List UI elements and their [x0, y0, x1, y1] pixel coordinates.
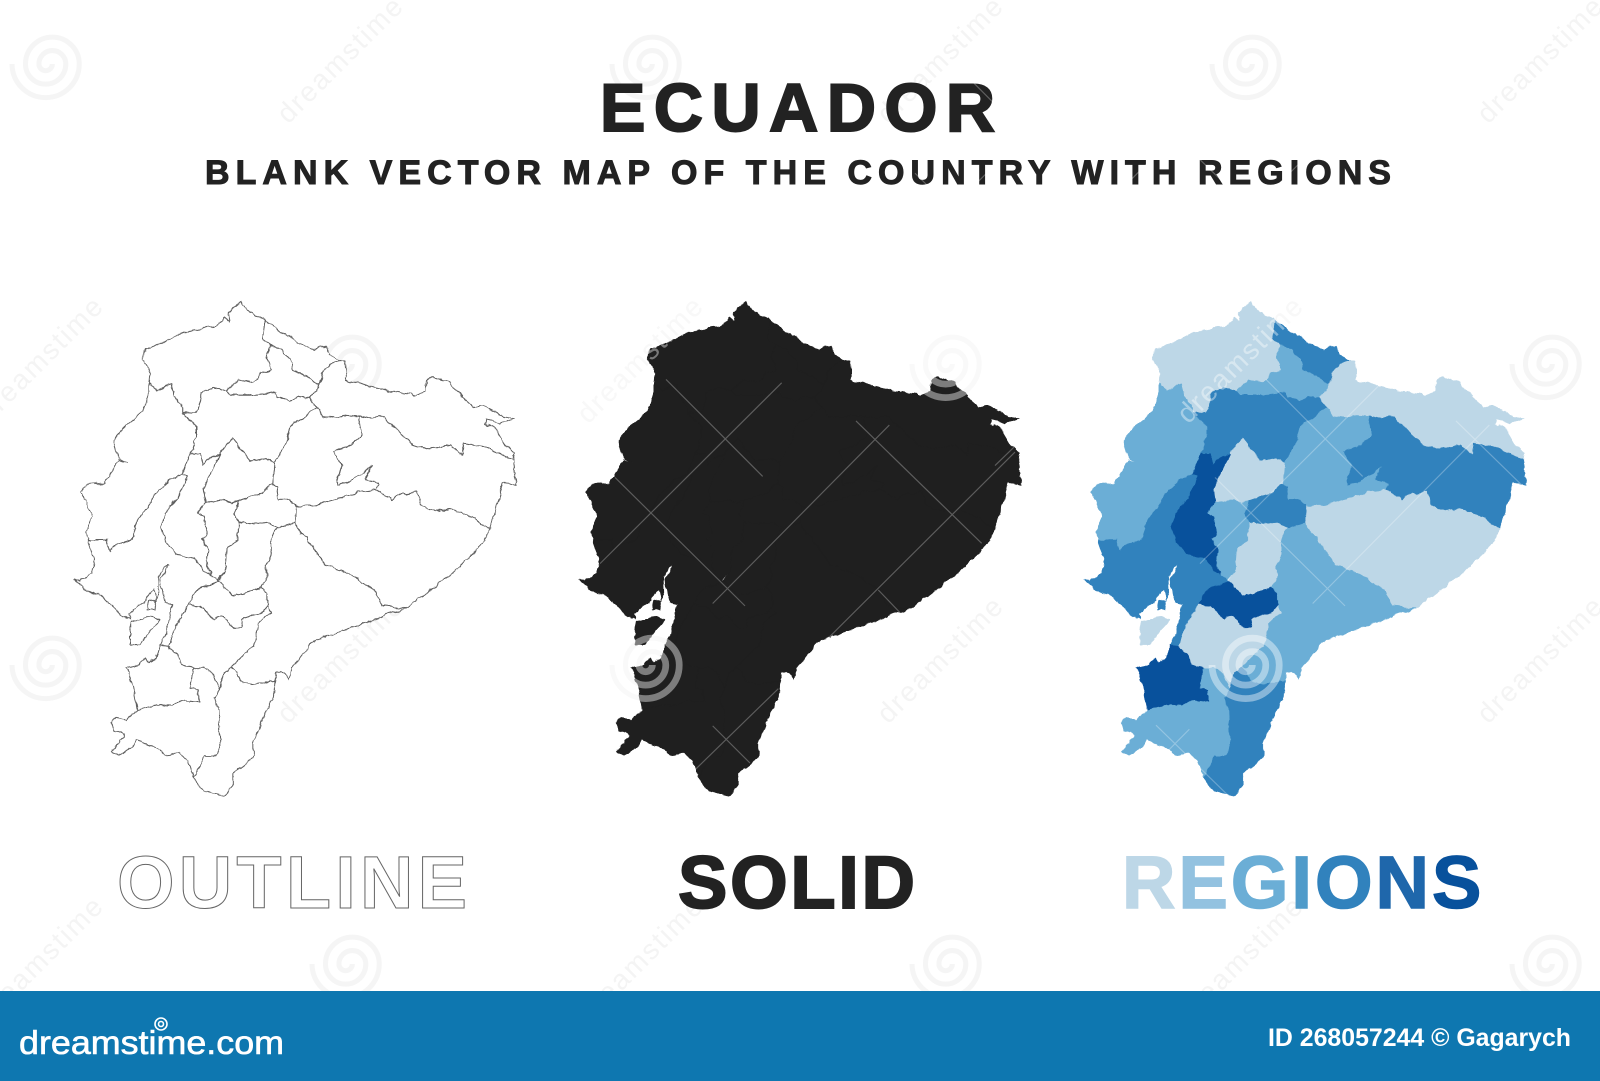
watermark overlay on the maps — [571, 75, 1600, 1074]
icon: dreamstime spiral — [155, 1018, 167, 1030]
watermark overlay on the maps: dreamstime — [1171, 290, 1310, 429]
watermark layer beneath the maps: dreamstime — [271, 590, 410, 729]
region: south-west coastal province — [1135, 645, 1208, 710]
region: gulf island — [1140, 616, 1169, 644]
region: large south-east province — [1305, 489, 1501, 608]
footer bar — [0, 991, 1600, 1081]
region: central highland province — [1228, 522, 1287, 596]
region: northern highland province — [1237, 346, 1328, 401]
label: outline: OUTLINE — [117, 841, 467, 924]
region: narrow highland province — [1208, 499, 1248, 580]
label: solid: SOLID — [678, 841, 915, 924]
footer logo: dreamstime.com — [19, 1024, 284, 1061]
footer image id and author: ID 268057244 © Gagarych — [1268, 1024, 1571, 1052]
region: northern border province — [1273, 321, 1349, 384]
region: far south-west province — [1122, 668, 1230, 777]
region: small central province — [1244, 484, 1306, 527]
region: central north province — [1192, 388, 1327, 465]
region: eastern province — [1343, 416, 1527, 529]
watermark layer beneath the maps: dreamstime — [871, 590, 1010, 729]
region: gulf province — [1084, 476, 1228, 646]
region: central lowland province — [1171, 454, 1230, 575]
region: north-west province — [1153, 302, 1281, 413]
region: southern amazon province — [1242, 522, 1416, 684]
title: ECUADOR — [600, 70, 995, 146]
watermark layer beneath the maps: dreamstime — [571, 890, 710, 1029]
region: north-east province — [1318, 361, 1524, 461]
region: western coastal province — [1091, 383, 1206, 552]
region: small gulf island — [1157, 599, 1167, 610]
region: south-central province — [1179, 605, 1281, 690]
map: regions — [1084, 302, 1527, 796]
region: far south-east province — [1203, 667, 1284, 796]
watermark layer beneath the maps: dreamstime — [571, 290, 710, 429]
region: upper amazon province — [1282, 408, 1388, 506]
region: southern highland province — [1198, 582, 1277, 628]
subtitle: BLANK VECTOR MAP OF THE COUNTRY WITH REGIONS — [205, 154, 1391, 192]
region: north-central highland province — [1213, 439, 1284, 503]
map: outline — [74, 302, 517, 796]
label: regions: REGIONS — [1122, 841, 1484, 924]
watermark layer beneath the maps: dreamstime — [1171, 890, 1310, 1029]
watermark layer beneath the maps: dreamstime — [1171, 290, 1310, 429]
watermark overlay on the maps: dreamstime — [571, 290, 710, 429]
map: solid — [579, 302, 1022, 796]
